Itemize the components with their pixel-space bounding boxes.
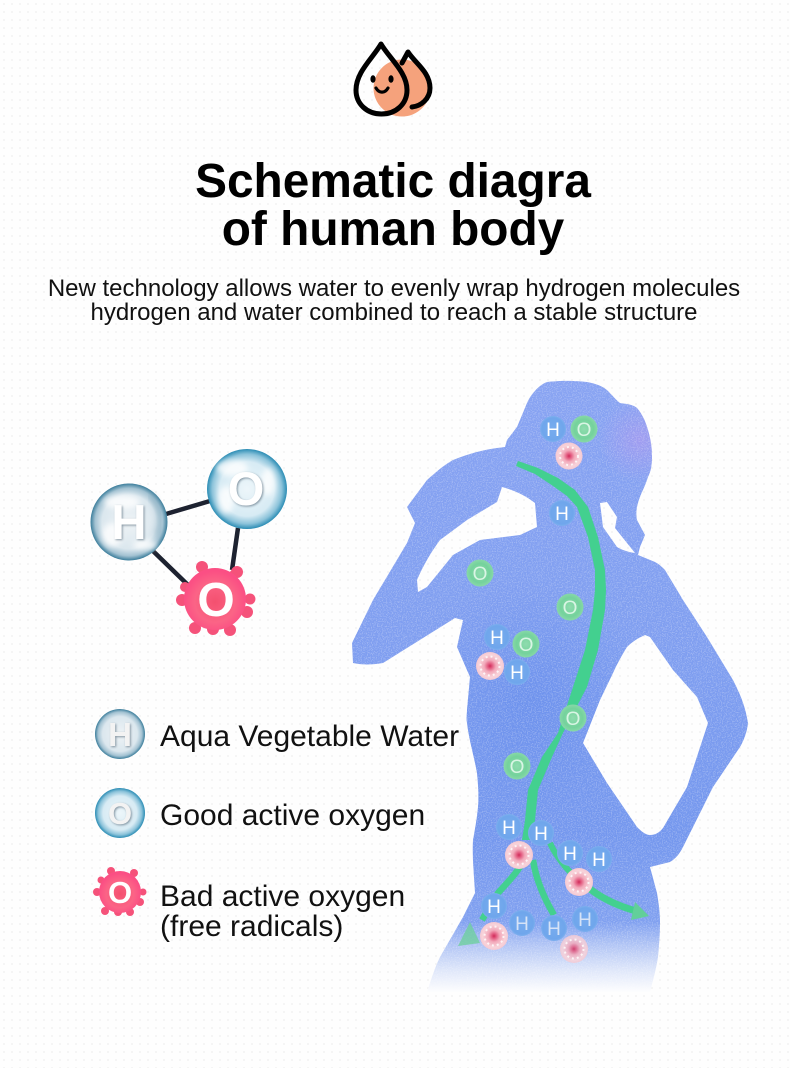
atoms inside body: [466, 416, 612, 963]
atom R3: [505, 841, 533, 869]
atom H10: [509, 910, 535, 936]
atom H4: H: [510, 663, 524, 684]
atom R1: [556, 442, 582, 470]
legend item: hydrogen: Aqua Vegetable Water: [160, 720, 459, 753]
atom H6: H: [534, 824, 548, 845]
legend item: good oxygen: Good active oxygen: [160, 799, 425, 832]
arrowhead: left branch: [458, 922, 480, 946]
atom O4: O: [519, 635, 533, 656]
atom H2: [549, 500, 575, 526]
atom H6: [528, 820, 554, 846]
atom O2: [466, 560, 494, 586]
atom H3: [484, 624, 510, 650]
atom O3: O: [563, 598, 577, 619]
atom: bad oxygen large: O: [197, 574, 235, 627]
atom O3: [556, 594, 584, 620]
legend item: good oxygen: O: [108, 796, 132, 831]
atom O1: O: [577, 420, 591, 441]
branch: right upper: [550, 843, 572, 874]
arrowhead: right branch: [631, 902, 649, 920]
atom: hydrogen large: [90, 484, 168, 560]
icon: water drops logo: [356, 44, 430, 116]
legend item: bad oxygen: (free radicals): [160, 910, 343, 943]
atom H8: H: [592, 850, 606, 871]
legend: [93, 709, 459, 943]
subtitle text: [48, 275, 740, 326]
atom O5: O: [566, 709, 580, 730]
atom H12: H: [578, 910, 592, 931]
branch: right lower: [590, 889, 636, 911]
legend item: bad oxygen: [93, 867, 405, 943]
branch: middle: [533, 860, 554, 915]
title: [195, 155, 591, 256]
atom H9: H: [487, 897, 501, 918]
atom R4: [565, 868, 593, 896]
atom O6: [504, 752, 530, 780]
legend item: bad oxygen: O: [108, 875, 132, 910]
subtitle text: New technology allows water to evenly wrap hydrogen molecules: [48, 275, 740, 302]
atom H10: H: [515, 914, 529, 935]
atom H4: [504, 659, 530, 685]
atom O2: O: [473, 564, 487, 585]
main trunk: [516, 461, 606, 840]
atom H9: [481, 893, 507, 919]
title: of human body: [222, 203, 565, 256]
atom: bad oxygen large: [176, 561, 256, 636]
atom H3: H: [490, 628, 504, 649]
legend item: bad oxygen: Bad active oxygen: [160, 880, 405, 913]
atom H1: H: [546, 420, 560, 441]
atom H1: [540, 416, 566, 442]
atom H7: [557, 840, 583, 866]
atom H8: [586, 846, 612, 872]
atom R6: [560, 935, 588, 963]
legend item: good oxygen: [95, 788, 425, 838]
human body silhouette: [340, 375, 760, 995]
atom H7: H: [563, 844, 577, 865]
atom: hydrogen large: H: [111, 496, 147, 550]
title: Schematic diagra: [195, 155, 591, 208]
atom O6: O: [510, 757, 524, 778]
legend item: hydrogen: H: [108, 716, 132, 753]
molecule diagram: [90, 449, 287, 636]
atom H2: H: [555, 504, 569, 525]
branch: left: [482, 860, 524, 920]
subtitle text: hydrogen and water combined to reach a stable structure: [90, 299, 698, 326]
atom O5: [560, 704, 586, 732]
green arrows: [458, 461, 649, 946]
atom H11: [541, 915, 567, 941]
atom R5: [480, 922, 508, 950]
atom: oxygen large: [207, 449, 287, 529]
legend item: hydrogen: [95, 709, 459, 759]
atom O1: [570, 416, 598, 442]
atom: oxygen large: O: [228, 462, 264, 515]
atom H12: [572, 906, 598, 932]
atom H5: [496, 814, 522, 840]
atom H5: H: [502, 818, 516, 839]
atom R2: [476, 652, 504, 680]
atom O4: [512, 630, 540, 658]
atom H11: H: [547, 919, 561, 940]
